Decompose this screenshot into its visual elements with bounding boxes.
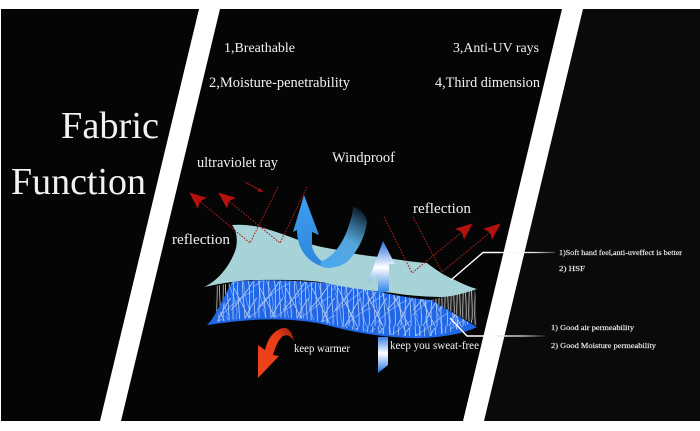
panel: centre diagram panel bbox=[121, 9, 562, 421]
grey fibres: left edge bbox=[214, 283, 232, 322]
note: lower layer properties bbox=[551, 323, 656, 350]
white fibre strands bbox=[214, 280, 470, 336]
arrow: left reflection one bbox=[190, 187, 278, 243]
panel: right notes panel bbox=[484, 9, 700, 421]
fibre strands: crossing layer bbox=[214, 280, 470, 336]
feature list: right column: 4,Third dimension bbox=[435, 75, 540, 91]
labels: diagram annotations bbox=[172, 150, 479, 355]
labels: diagram annotations: reflection bbox=[172, 232, 231, 248]
feature list: right column bbox=[435, 40, 540, 91]
feature list: left column: 1,Breathable bbox=[224, 41, 295, 56]
fabric diagram bbox=[204, 225, 500, 338]
labels: diagram annotations: ultraviolet ray bbox=[197, 155, 279, 171]
title: Function bbox=[11, 161, 146, 203]
title bbox=[11, 105, 159, 203]
callout line: lower layer bbox=[450, 318, 490, 336]
grey fibre strands: right edge bbox=[431, 289, 477, 326]
fibre strands: vertical layer bbox=[214, 280, 470, 336]
note: top layer properties: 1)Soft hand feel,anti-uveffect is better bbox=[559, 248, 682, 257]
arrow band: left with head bbox=[293, 195, 330, 268]
feature list: left column: 2,Moisture-penetrability bbox=[209, 75, 351, 91]
title: Fabric bbox=[61, 105, 159, 147]
top membrane layer bbox=[204, 225, 477, 297]
note: top layer properties: 2) HSF bbox=[559, 264, 585, 273]
arrow band: right fading bbox=[320, 207, 367, 268]
note: lower layer properties: 1) Good air permeability bbox=[551, 323, 634, 332]
feature list: left column bbox=[209, 41, 351, 91]
note: lower layer properties: 2) Good Moisture permeability bbox=[551, 341, 656, 350]
note: top layer properties bbox=[559, 248, 682, 273]
arrow: incoming ultraviolet bbox=[245, 182, 263, 192]
arrow: white moisture down bbox=[378, 337, 388, 373]
arrow: white moisture up bbox=[368, 241, 395, 294]
callout line: lower layer fade bbox=[490, 335, 545, 337]
arrow: windproof curved blue bbox=[293, 195, 367, 268]
blue fibre layer bbox=[207, 280, 477, 338]
callout line: top layer bbox=[451, 252, 500, 280]
labels: diagram annotations: Windproof bbox=[332, 150, 395, 166]
arrow: red keep warmer bbox=[258, 328, 294, 378]
labels: diagram annotations: keep you sweat-free bbox=[390, 339, 479, 352]
arrow: right reflection one bbox=[384, 217, 472, 273]
arrow: right reflection two bbox=[413, 217, 500, 272]
grey fibres: right edge bbox=[431, 289, 477, 326]
panel: left title panel bbox=[1, 9, 199, 421]
arrow: left reflection two bbox=[219, 187, 307, 243]
callout line: top layer fade bbox=[500, 252, 555, 254]
feature list: right column: 3,Anti-UV rays bbox=[453, 40, 539, 55]
labels: diagram annotations: reflection bbox=[413, 201, 472, 217]
labels: diagram annotations: keep warmer bbox=[294, 343, 350, 355]
